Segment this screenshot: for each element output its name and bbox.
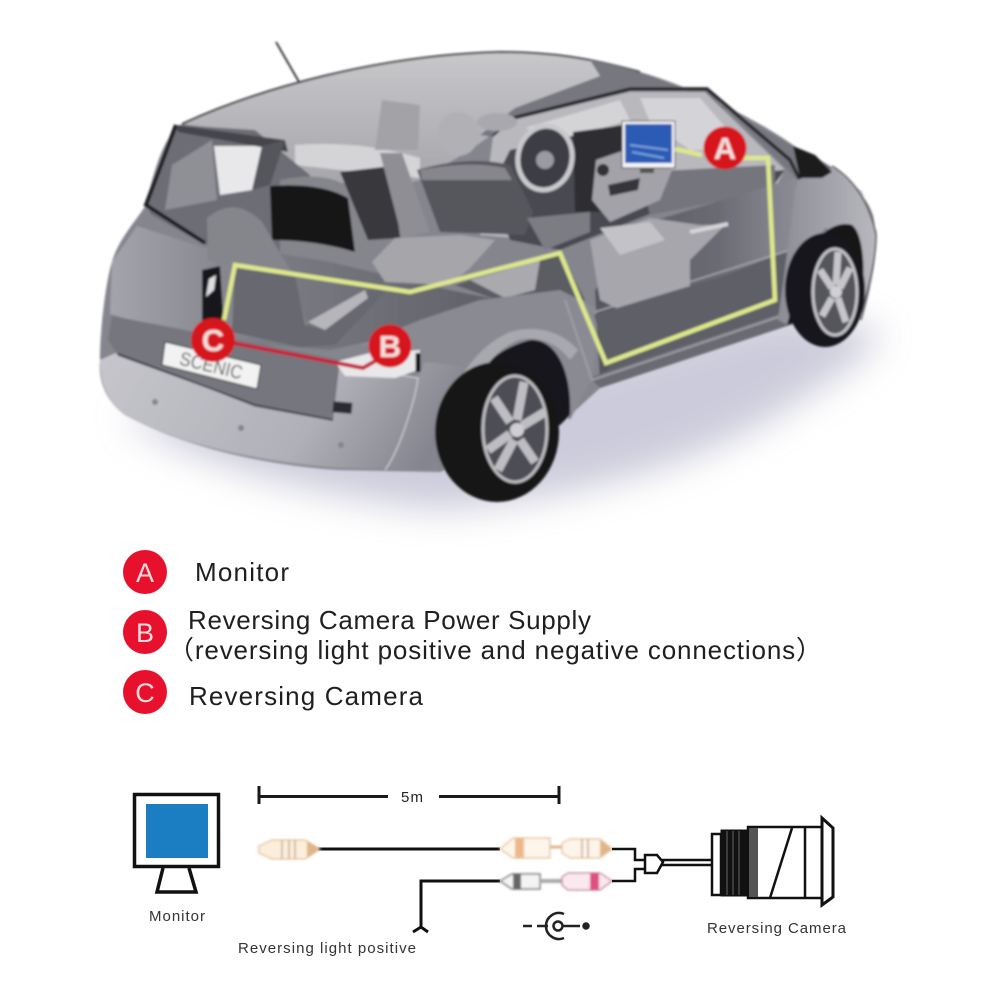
car body (100, 42, 877, 502)
rear seat backs (270, 153, 533, 262)
middle RCA plugs (500, 838, 612, 858)
logo panel (202, 266, 224, 335)
badge C: C (202, 323, 224, 358)
reversing light label: Reversing light positive (238, 940, 416, 957)
front wheel (785, 233, 865, 347)
centre console (592, 150, 672, 222)
legend item C: Reversing Camera (189, 681, 424, 711)
windows and cabin (480, 92, 785, 240)
legend item B: （reversing light positive and negative connections） (168, 635, 822, 665)
door sill (590, 312, 790, 388)
ground shadow (120, 310, 880, 510)
badge A (704, 126, 746, 170)
number plate (162, 342, 261, 389)
boot floor and rear quarter (335, 290, 600, 470)
legend (123, 550, 822, 714)
5m dimension: 5m (401, 789, 423, 806)
video cable with RCA plugs (259, 838, 612, 859)
legend item B: Reversing Camera Power Supply (188, 605, 591, 635)
wiring diagram (134, 786, 847, 957)
wing mirror (793, 146, 832, 178)
badge A: A (714, 131, 736, 166)
monitor icon: Monitor (149, 908, 205, 925)
yellow video cable (224, 149, 775, 363)
reflector (333, 401, 352, 414)
camera (712, 818, 833, 905)
number plate: SCENIC (177, 349, 244, 384)
monitor on dashboard (622, 121, 675, 173)
rear wheel arch (460, 340, 570, 440)
rear window (148, 125, 310, 255)
parking sensors (152, 399, 344, 448)
dark roof side (480, 60, 832, 178)
dashboard dark (490, 125, 785, 250)
5m dimension (259, 786, 559, 806)
power cable with plugs (413, 873, 612, 932)
badge B: B (379, 329, 401, 364)
boot seat (207, 207, 307, 347)
red power cable (233, 343, 377, 368)
tailgate (110, 226, 500, 350)
legend item A: A (136, 558, 154, 588)
tail light (335, 350, 420, 378)
legend item A: Monitor (195, 557, 289, 587)
ground symbol (523, 913, 588, 939)
front seat (527, 212, 728, 320)
badge C (191, 318, 235, 362)
legend item C: C (135, 678, 155, 708)
silhouette (100, 52, 876, 472)
grey and pink plugs (500, 873, 612, 890)
folded cushion (372, 235, 495, 285)
translucent roof (182, 52, 640, 190)
car illustration (100, 42, 880, 510)
legend item A (123, 550, 289, 594)
side door panel (595, 178, 800, 385)
legend item B: B (136, 618, 154, 648)
rear bumper (100, 352, 478, 470)
reversing camera label: Reversing Camera (707, 920, 847, 937)
rear wheel (435, 362, 559, 502)
legend item C (123, 670, 424, 714)
badge B (368, 324, 412, 368)
headrests (437, 112, 479, 156)
legend item B (123, 605, 822, 665)
antenna (276, 42, 306, 94)
Y junction (612, 849, 712, 881)
steering wheel (513, 122, 577, 194)
front fender (778, 168, 877, 326)
left RCA plug (259, 840, 320, 859)
monitor icon (134, 794, 218, 925)
